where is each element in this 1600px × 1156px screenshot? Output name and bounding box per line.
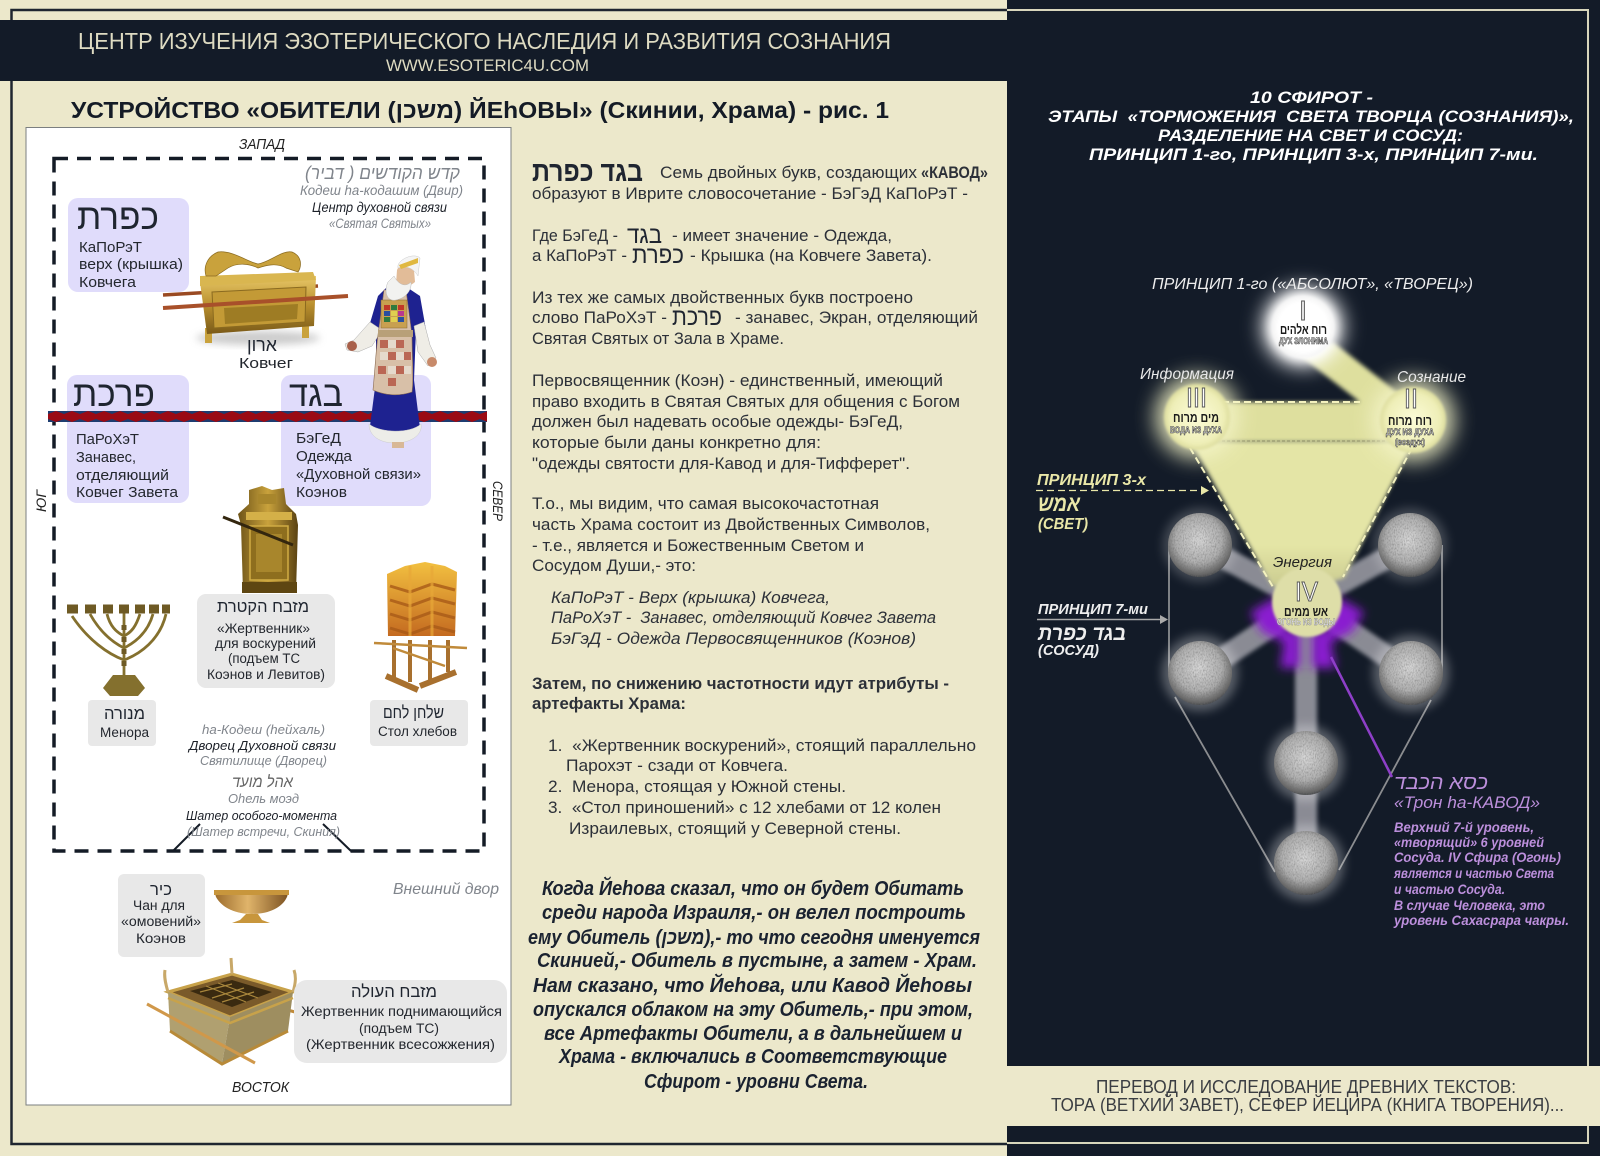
callout: beged: Одежда (296, 448, 353, 465)
text block: dual symbols: часть Храма состоит из Двойственных Символов, (532, 516, 930, 534)
callout: parochet: Ковчег Завета (76, 484, 179, 501)
holy of holies label: Кодеш hа-кодашим (Двир) (300, 182, 463, 198)
tent door lines (173, 824, 351, 851)
label: throne of kavod: является и частью Света (1393, 865, 1554, 881)
label: throne of kavod: уровень Сахасрара чакры. (1393, 912, 1569, 928)
text block: artefacts list: 3. «Стол приношений» с 12 хлебами от 12 колен (548, 799, 941, 817)
text block: intro letters: Семь двойных букв, создающих (660, 164, 918, 182)
lower tree channels (1200, 545, 1411, 863)
header url: WWW.ESOTERIC4U.COM (386, 56, 589, 75)
text block: italic quote: опускался облаком на эту Обитель,- при этом, (533, 999, 973, 1021)
sanctuary label: Святилище (Дворец) (200, 753, 327, 768)
icon: bronze altar (147, 958, 295, 1064)
callout: bronze altar: Жертвенник поднимающийся (301, 1004, 502, 1019)
text block: dual symbols: ПаРоХэТ - Занавес, отделяющий Ковчег Завета (551, 609, 936, 627)
text block: italic quote: ему Обитель (משכן),- то что сегодня именуется (528, 927, 980, 949)
callout: beged (281, 373, 431, 506)
text block: artefacts list: 2. Менора, стоящая у Южной стены. (548, 778, 846, 796)
text block: italic quote: Сфирот - уровни Света. (644, 1071, 868, 1093)
label: throne of kavod: Верхний 7-й уровень, (1394, 819, 1534, 835)
sefira I (1263, 287, 1343, 367)
text block: intro letters: «КАВОД» (921, 164, 988, 182)
purple glow of fourth sefira (1250, 596, 1364, 668)
text block: high priest: право входить в Святая Святых для общения с Богом (532, 393, 960, 411)
icon: menorah (67, 609, 170, 696)
sanctuary label (187, 722, 336, 768)
callout: showbread: Стол хлебов (378, 724, 457, 739)
callout: beged: בגד (289, 373, 343, 414)
lower spheres (1162, 508, 1449, 901)
callout: showbread: שלחן לחם (383, 703, 444, 722)
text block: italic quote: Нам сказано, что Йеhова, или Кавод Йеhовы (533, 973, 972, 997)
label: throne of kavod: и частью Сосуда. (1394, 881, 1505, 897)
callout: laver: Коэнов (136, 931, 186, 946)
callout: bronze altar: מזבח העולה (351, 982, 437, 1001)
sefira II (1371, 378, 1455, 462)
sefira III: מים מרוח (1173, 410, 1219, 425)
callout: incense altar: (подъем ТС (228, 651, 300, 666)
header bar (0, 20, 1007, 81)
right arm sleeve (414, 322, 436, 366)
label: principle of three: אמש (1038, 491, 1081, 516)
right panel frame (1007, 10, 1588, 1143)
panel: tabernacle plan (26, 128, 511, 1105)
callout: incense altar: Коэнов и Левитов) (207, 667, 325, 682)
text block: intro letters: образуют в Иврите словосочетание - БэГэД КаПоРэТ - (532, 185, 968, 203)
right heading: РАЗДЕЛЕНИЕ НА СВЕТ И СОСУД: (1158, 126, 1463, 145)
tent of meeting label: Шатер особого-момента (186, 808, 337, 823)
callout: incense altar: «Жертвенник» (217, 621, 310, 636)
callout: beged: Коэнов (296, 484, 347, 501)
callout: kaporet: верх (крышка) (79, 256, 183, 273)
callout: bronze altar (294, 980, 507, 1063)
head (396, 264, 415, 287)
direction label east: ВОСТОК (232, 1079, 290, 1096)
icon: incense altar (223, 486, 298, 593)
label: throne of kavod (1393, 772, 1569, 928)
label: throne of kavod: В случае Человека, это (1394, 897, 1545, 913)
direction label south: ЮГ (33, 489, 49, 512)
text block: intro letters: בגד כפרת (532, 156, 643, 187)
callout: incense altar: для воскурений (215, 636, 316, 651)
right heading: 10 СФИРОТ - (1250, 88, 1373, 107)
callout: laver: Чан для (133, 898, 185, 913)
text block: italic quote: Храма - включались в Соответствующие (558, 1046, 947, 1068)
sefira IV: IV (1295, 576, 1318, 607)
sefira III (1155, 375, 1239, 459)
header title: ЦЕНТР ИЗУЧЕНИЯ ЭЗОТЕРИЧЕСКОГО НАСЛЕДИЯ И РАЗВИТИЯ СОЗНАНИЯ (78, 28, 891, 54)
callout: laver: «омовений» (121, 914, 201, 929)
text block: intro letters (532, 156, 988, 348)
tent of meeting label (186, 773, 340, 839)
tent of meeting label: אהל מועד (232, 773, 294, 791)
text block: dual symbols (532, 495, 936, 648)
outer court label: Внешний двор (393, 881, 499, 898)
callout: menorah: מנורה (104, 704, 145, 723)
bottom banner: ТОРА (ВЕТХИЙ ЗАВЕТ), СЕФЕР ЙЕЦИРА (КНИГА ТВОРЕНИЯ)... (1051, 1094, 1564, 1115)
robe hem (369, 424, 421, 443)
main heading: УСТРОЙСТВО «ОБИТЕЛИ (משכן) ЙЕhОВЫ» (Скинии, Храма) - рис. 1 (71, 96, 889, 123)
sefira II: II (1404, 383, 1418, 414)
sefira IV: אש ממים (1284, 604, 1328, 619)
text block: artefacts list: Парохэт - сзади от Ковчега. (566, 757, 788, 775)
label: throne of kavod: «творящий» 6 уровней (1394, 834, 1544, 850)
callout: parochet: ПаРоХэТ (76, 431, 139, 448)
text block: dual symbols: Т.о., мы видим, что самая высокочастотная (532, 495, 879, 513)
text block: dual symbols: БэГэД - Одежда Первосвященников (Коэнов) (551, 630, 916, 648)
text block: artefacts list (532, 675, 976, 838)
label: principle of seven (1037, 601, 1168, 659)
label: information: Информация (1140, 366, 1234, 383)
sefira II: (воздух) (1395, 437, 1425, 447)
callout: menorah (88, 700, 156, 746)
text block: high priest: должен был надевать особые одежды- БэГеД, (532, 413, 903, 431)
text block: intro letters: פרכת (672, 304, 722, 331)
tent of meeting label: (Шатер встречи, Скиния) (187, 824, 340, 839)
text block: intro letters: בגד (627, 222, 662, 249)
label: energy: Энергия (1273, 554, 1332, 571)
label: principle of seven: ПРИНЦИП 7-ми (1038, 601, 1148, 618)
label: principle of seven: (СОСУД) (1038, 642, 1099, 659)
sefira IV: ОГОНЬ ИЗ ВОДЫ (1277, 617, 1335, 627)
label: principle of three: (СВЕТ) (1038, 516, 1088, 533)
text block: intro letters: Святая Святых от Зала в Храме. (532, 330, 784, 348)
label: throne of kavod: «Трон hа-КАВОД» (1394, 793, 1540, 812)
label: principle of seven: בגד כפרת (1037, 622, 1126, 645)
callout: laver: כיר (150, 880, 172, 899)
left arm sleeve (345, 322, 382, 352)
upper triangle of light (1190, 342, 1414, 590)
throne pointer line (1331, 657, 1392, 777)
callout: menorah: Менора (100, 725, 149, 740)
text block: high priest: Первосвященник (Коэн) - единственный, имеющий (532, 372, 943, 390)
sefira III: ВОДА ИЗ ДУХА (1170, 425, 1222, 435)
callout: incense altar: מזבח הקטרת (217, 597, 309, 616)
sefira IV (1272, 567, 1342, 637)
holy of holies label (300, 163, 463, 231)
callout: parochet: Занавес, (76, 449, 136, 466)
callout: kaporet: КаПоРэТ (79, 239, 142, 256)
text block: high priest: которые были даны конкретно для: (532, 434, 821, 452)
icon: high priest (345, 256, 437, 448)
text block: dual symbols: КаПоРэТ - Верх (крышка) Ковчега, (551, 589, 830, 607)
holy of holies label: Центр духовной связи (312, 199, 447, 215)
text block: intro letters: - занавес, Экран, отделяющий (735, 309, 978, 327)
tent of meeting label: Оhель моэд (228, 791, 299, 806)
callout: kaporet: Ковчега (79, 274, 137, 291)
ephod (373, 290, 413, 395)
icon: table of showbread (374, 562, 467, 690)
text block: artefacts list: Израилевых, стоящий у Северной стены. (569, 820, 901, 838)
bottom banner: ПЕРЕВОД И ИССЛЕДОВАНИЕ ДРЕВНИХ ТЕКСТОВ: (1096, 1077, 1516, 1097)
label: consciousness: Сознание (1397, 369, 1466, 386)
callout: beged: «Духовной связи» (296, 466, 421, 483)
text block: italic quote: Когда Йеhова сказал, что он будет Обитать (542, 876, 964, 900)
callout: beged: БэГеД (296, 430, 341, 447)
text block: intro letters: - Крышка (на Ковчеге Завета). (690, 247, 932, 265)
sanctuary label: hа-Кодеш (hейхаль) (202, 722, 325, 737)
text block: intro letters: - имеет значение - Одежда, (672, 227, 892, 245)
text block: intro letters: כפרת (632, 242, 684, 269)
right heading: ЭТАПЫ «ТОРМОЖЕНИЯ СВЕТА ТВОРЦА (СОЗНАНИЯ)», (1048, 107, 1574, 126)
callout: bronze altar: (Жертвенник всесожжения) (306, 1037, 495, 1052)
label: throne of kavod: כסא הכבד (1394, 772, 1488, 794)
callout: kaporet: כפרת (77, 196, 159, 237)
icon: ark of the covenant (163, 252, 348, 345)
text block: dual symbols: Сосудом Души,- это: (532, 557, 696, 575)
right heading (1048, 88, 1574, 164)
callout: parochet: отделяющий (76, 467, 169, 484)
label: principle of three: ПРИНЦИП 3-х (1037, 472, 1147, 489)
text block: intro letters: а КаПоРэТ - (532, 247, 627, 265)
text block: italic quote (528, 876, 980, 1093)
robe (368, 288, 426, 434)
text block: high priest (532, 372, 960, 473)
text block: italic quote: все Артефакты Обители, а в дальнейшем и (544, 1023, 962, 1045)
holy of holies label: «Святая Святых» (329, 215, 431, 231)
callout: incense altar (197, 594, 335, 688)
label: principle of three (1036, 472, 1209, 533)
callout: showbread (370, 700, 468, 746)
text block: artefacts list: Затем, по снижению частотности идут атрибуты - (532, 675, 949, 693)
text block: intro letters: слово ПаРоХэТ - (532, 309, 667, 327)
icon: laver bowl (214, 890, 289, 923)
sefira I: ДУХ ЭЛОНИМА (1279, 336, 1328, 346)
text block: intro letters: Из тех же самых двойственных букв построено (532, 289, 913, 307)
vessel outline (1169, 545, 1442, 872)
sefira I: רוח אלהים (1280, 322, 1327, 337)
ark caption: Ковчег (239, 355, 294, 372)
sanctuary label: Дворец Духовной связи (187, 738, 336, 753)
callout: parochet (67, 373, 189, 503)
panel: sefirot (1007, 0, 1600, 1156)
label: throne of kavod: Сосуда. IV Сфира (Огонь) (1394, 849, 1561, 865)
text block: artefacts list: 1. «Жертвенник воскурений», стоящий параллельно (548, 737, 976, 755)
holy of holies label: קדש הקודשים ( דביר) (305, 163, 460, 183)
label: principle of one: ПРИНЦИП 1-го («АБСОЛЮТ», «ТВОРЕЦ») (1152, 276, 1473, 293)
text block: italic quote: среди народа Израиля,- он велел построить (542, 902, 966, 924)
ark caption (239, 335, 294, 372)
left outer frame (12, 10, 1007, 1144)
dashed triangle edges (1190, 402, 1412, 587)
bottom banner (1007, 1066, 1600, 1126)
sefira II: ДУХ ИЗ ДУХА (1386, 427, 1434, 437)
text block: artefacts list: артефакты Храма: (532, 695, 686, 713)
direction label west: ЗАПАД (239, 136, 285, 153)
text block: high priest: "одежды святости для-Кавод и для-Тифферет". (532, 455, 910, 473)
sefira I: I (1299, 295, 1307, 326)
tent dashed outline (54, 158, 484, 851)
sefira II: רוח מרוח (1388, 413, 1432, 428)
curtain band (48, 411, 487, 422)
callout: parochet: פרכת (73, 373, 155, 414)
direction label north: СЕВЕР (490, 481, 506, 522)
sefira III: III (1186, 382, 1207, 413)
text block: intro letters: Где БэГеД - (532, 227, 618, 245)
callout: bronze altar: (подъем ТС) (359, 1021, 439, 1036)
text block: italic quote: Скинией,- Обитель в пустыне, а затем - Храм. (537, 950, 977, 972)
text block: dual symbols: - т.е., является и Божественным Светом и (532, 537, 864, 555)
callout: kaporet (68, 196, 189, 292)
ark caption: ארון (247, 335, 278, 355)
callout: laver (118, 874, 205, 957)
right heading: ПРИНЦИП 1-го, ПРИНЦИП 3-х, ПРИНЦИП 7-ми. (1089, 145, 1538, 164)
